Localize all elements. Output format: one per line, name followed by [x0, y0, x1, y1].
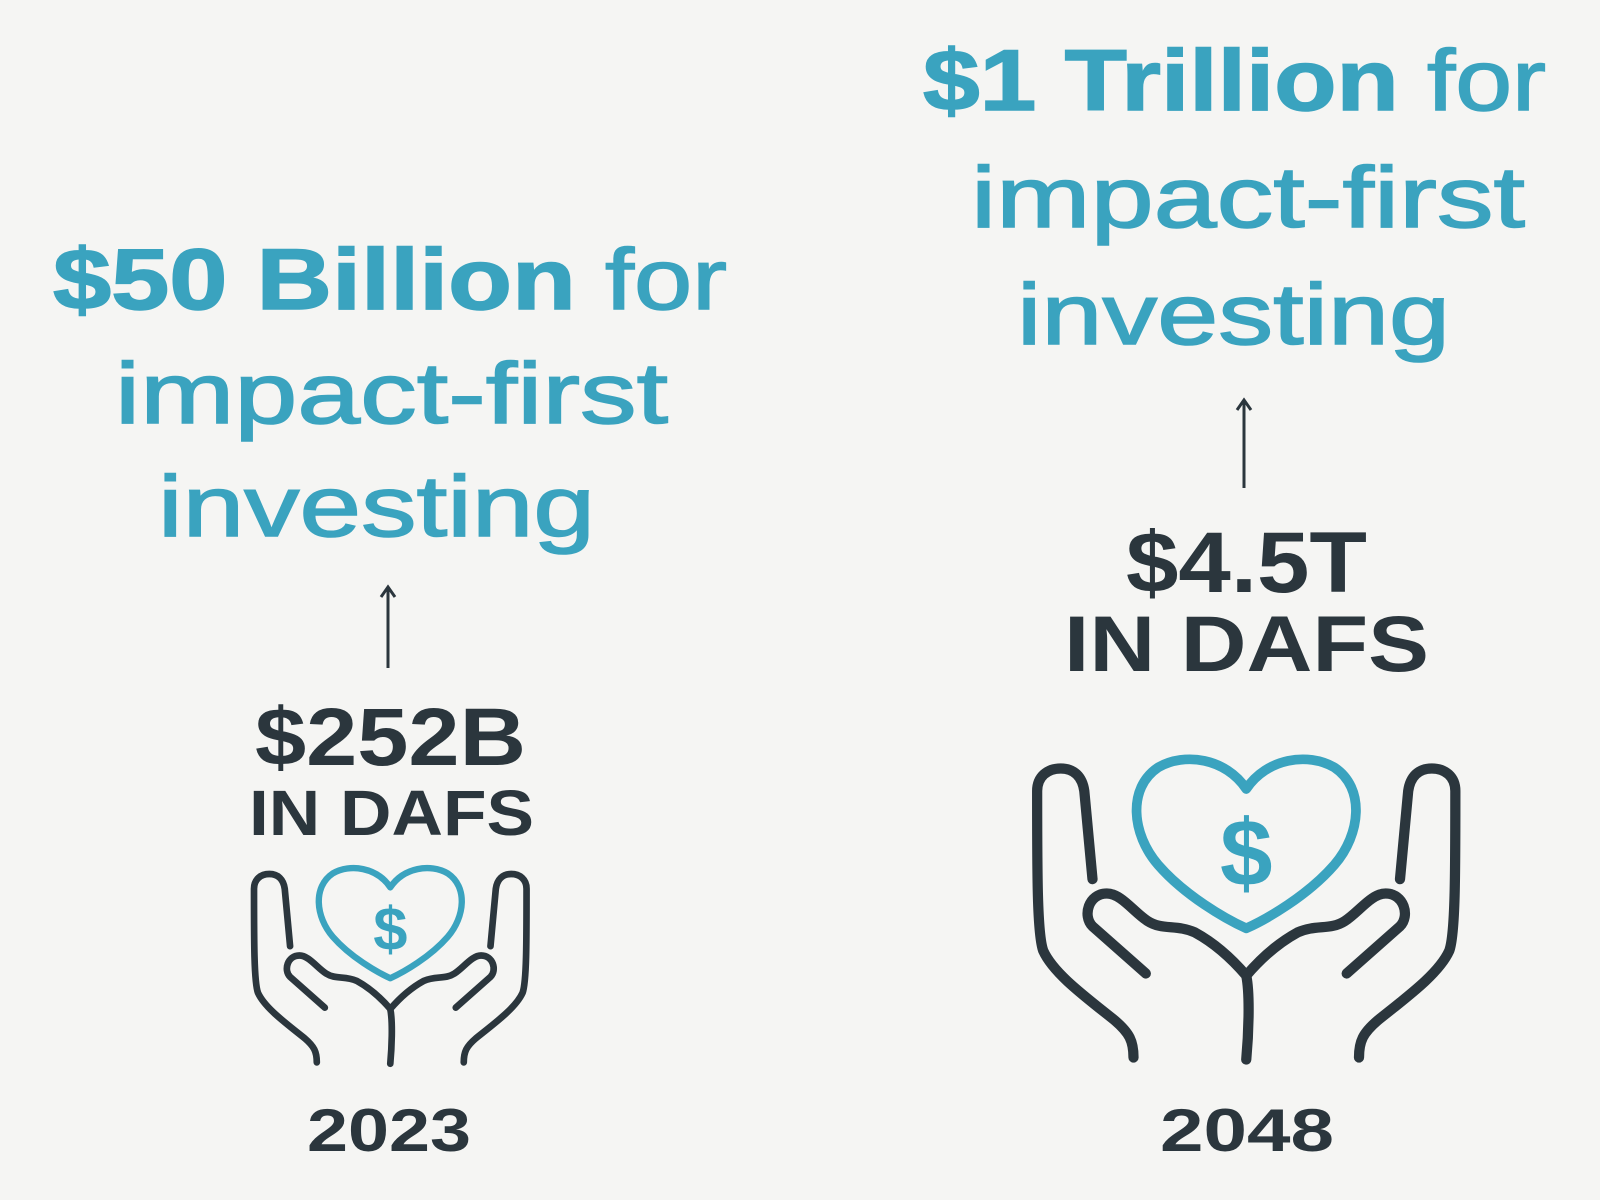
- panel: 2023: [53, 232, 727, 1164]
- heading: $1 Trillion for impact-first investing: [923, 33, 1546, 363]
- year label 2048: 2048: [1160, 1097, 1334, 1164]
- icon: hands holding heart with dollar: [254, 868, 527, 1064]
- stat: $252B in DAFs: $252B: [255, 692, 526, 783]
- heading: $50 Billion for impact-first investing: investing: [158, 459, 595, 555]
- heading: $1 Trillion for impact-first investing: investing: [1017, 267, 1450, 363]
- stat: $4.5T in DAFs: $4.5T: [1126, 515, 1367, 611]
- heading: $50 Billion for impact-first investing: impact-first: [115, 346, 668, 442]
- heading: $50 Billion for impact-first investing: [53, 232, 727, 555]
- heading: $1 Trillion for impact-first investing: impact-first: [971, 150, 1525, 246]
- panel: 2048: [923, 33, 1546, 1164]
- stat: $252B in DAFs: IN DAFS: [249, 777, 534, 849]
- heading: $1 Trillion for impact-first investing: $1 Trillion for: [923, 33, 1546, 129]
- stat: $4.5T in DAFs: [1064, 515, 1429, 688]
- icon: hands holding heart with dollar: [1037, 759, 1455, 1060]
- year label 2023: 2023: [307, 1097, 471, 1164]
- heading: $50 Billion for impact-first investing: $50 Billion for: [53, 232, 727, 328]
- arrow: up: [381, 587, 395, 668]
- stat: $252B in DAFs: [249, 692, 534, 849]
- arrow: up: [1237, 400, 1251, 488]
- stat: $4.5T in DAFs: IN DAFS: [1064, 599, 1429, 688]
